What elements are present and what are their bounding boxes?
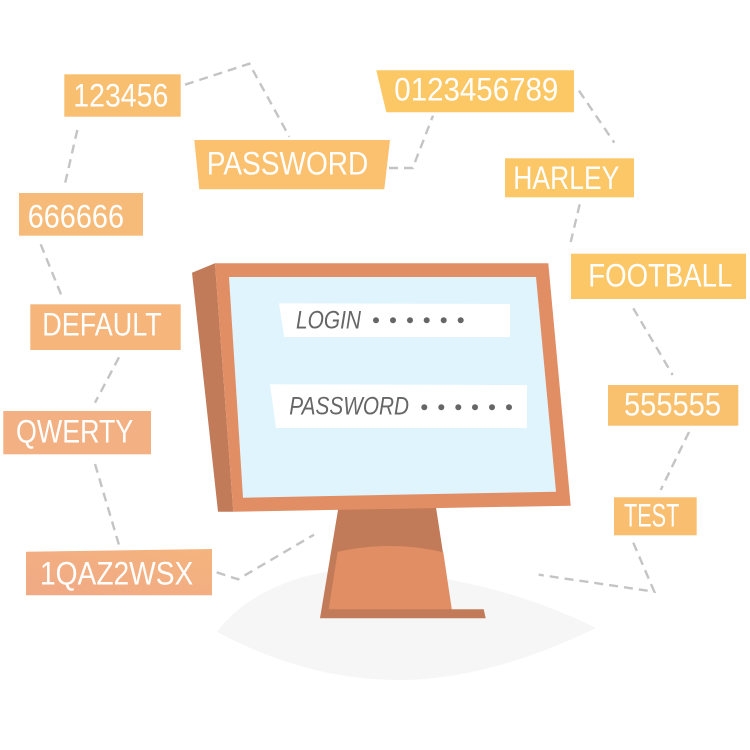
- monitor: [192, 263, 571, 512]
- tag: 555555: 555555: [624, 387, 721, 423]
- tag: 0123456789: 0123456789: [394, 72, 558, 108]
- tag: 666666: 666666: [28, 198, 124, 234]
- ground shadow: [217, 570, 596, 680]
- dashed connector lines: [41, 64, 689, 592]
- login field: LOGIN: [296, 306, 362, 334]
- tag: TEST: TEST: [624, 498, 679, 534]
- tag: PASSWORD: [194, 140, 390, 189]
- tag: HARLEY: HARLEY: [513, 160, 619, 196]
- password field: PASSWORD: [289, 393, 409, 421]
- monitor stand: [320, 507, 486, 618]
- monitor front frame: [215, 263, 571, 512]
- tag: 1QAZ2WSX: 1QAZ2WSX: [40, 555, 193, 591]
- password field: [270, 384, 527, 428]
- tag: 123456: 123456: [73, 78, 168, 114]
- monitor screen: [229, 277, 556, 498]
- tag: PASSWORD: PASSWORD: [207, 145, 368, 181]
- login field: [279, 303, 510, 337]
- tag: QWERTY: QWERTY: [16, 413, 133, 449]
- tag: DEFAULT: DEFAULT: [42, 307, 162, 343]
- monitor side panel: [192, 263, 233, 512]
